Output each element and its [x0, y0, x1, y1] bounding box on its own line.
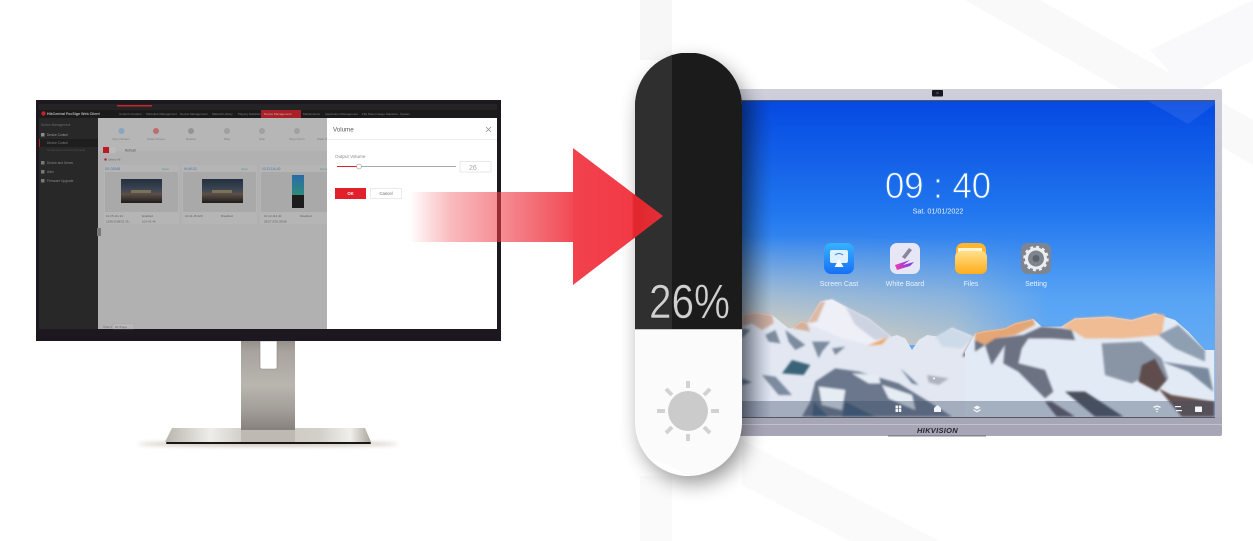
toolbar buttons: Reboot — [186, 137, 196, 141]
sidebar menu — [39, 118, 98, 329]
sidebar menu: Conference Control Terminal — [47, 148, 85, 152]
dimmed content area: 20 /Page — [115, 325, 127, 329]
device card 1: Enabled — [142, 214, 153, 218]
device card 1: 1296/1208/31.35... — [106, 220, 131, 224]
app: setting: Setting — [1025, 281, 1047, 288]
toolbar buttons: Open Screen — [112, 137, 130, 141]
toolbar buttons: Play — [224, 137, 230, 141]
volume dialog: Volume — [333, 126, 354, 134]
light pill section — [635, 329, 742, 476]
device card 3: 10.12.114.40 — [264, 214, 282, 218]
toolbar buttons: Stop Cut-In — [289, 137, 305, 141]
software screen — [39, 104, 497, 329]
device card 3: Open — [320, 167, 328, 171]
device card 2: IH-65.D2 — [184, 167, 197, 171]
device card 3: 25/27.5/32.25GB — [264, 220, 287, 224]
dimmed content area: Total 3 — [103, 325, 112, 329]
dimmed content area: Refresh — [125, 148, 136, 152]
sidebar menu: Device Management — [41, 123, 70, 127]
device card 3 — [260, 165, 328, 224]
app: files — [955, 243, 987, 288]
app: setting — [1021, 243, 1051, 288]
top navigation bar: System — [400, 112, 411, 116]
device card 1 — [104, 165, 179, 224]
panel frame: HIKVISION — [917, 426, 958, 435]
toolbar buttons: Clear P — [317, 137, 327, 141]
top navigation bar: Schedule Management — [146, 112, 177, 116]
sidebar menu: Device Control — [47, 141, 68, 145]
top navigation bar — [39, 110, 497, 118]
sidebar menu: Alert — [47, 170, 54, 174]
app: screen cast: Screen Cast — [820, 281, 858, 288]
app: white board: White Board — [886, 281, 924, 288]
percentage value: 26% — [649, 276, 730, 329]
sidebar menu: Device Control — [47, 133, 68, 137]
desktop monitor — [36, 100, 501, 446]
volume dialog: 26 — [469, 165, 477, 172]
icon: brightness sun — [657, 381, 719, 441]
device card 2 — [182, 165, 257, 224]
interactive flat panel — [735, 89, 1222, 436]
pill shadow — [640, 62, 747, 483]
device card 1: 101-41-46 — [142, 220, 156, 224]
device card 2: 10.41.15.220 — [185, 214, 203, 218]
device card 1: 10.25.111.12 — [106, 214, 123, 218]
device card 2: Disabled — [221, 214, 233, 218]
mountains right — [965, 313, 1214, 420]
clock: 09 : 40 — [885, 165, 991, 206]
top navigation bar: Playing Statistics — [238, 112, 261, 116]
top navigation bar: Device Management — [264, 112, 292, 116]
dark pill section — [635, 53, 742, 329]
app: files: Files — [964, 281, 979, 288]
volume dialog — [327, 118, 497, 329]
sidebar menu: Device and Server — [47, 161, 74, 165]
red arrow — [410, 148, 663, 285]
sidebar menu: Firmware Upgrade — [47, 179, 74, 183]
toolbar buttons: Stop — [259, 137, 265, 141]
date: Sat. 01/01/2022 — [913, 206, 963, 216]
app: white board — [886, 243, 924, 288]
monitor stand — [138, 341, 398, 446]
top navigation bar: HikCentral FocSign Web Client — [47, 112, 100, 116]
panel frame — [735, 89, 1222, 436]
monitor bezel — [36, 100, 501, 341]
top navigation bar: Flat Panel Usage Statistics — [362, 112, 398, 116]
top navigation bar: Device Management — [180, 112, 208, 116]
device card 3: Disabled — [300, 214, 312, 218]
toolbar buttons — [112, 128, 327, 141]
dimmed content area: Select All — [108, 158, 121, 162]
volume dialog: Output Volume — [335, 154, 366, 159]
volume dialog: OK — [347, 191, 354, 196]
device card 1: DS-D5A55 — [105, 167, 120, 171]
top navigation bar: Application Management — [325, 112, 358, 116]
app: screen cast — [820, 243, 858, 288]
device card 3: 10.12.114.40 — [262, 167, 281, 171]
dock icons — [896, 405, 1202, 412]
panel screen — [742, 101, 1215, 420]
top navigation bar: Content Creation — [119, 112, 142, 116]
brightness slider pill — [635, 53, 747, 483]
dimmed content area — [97, 118, 328, 329]
device card 1: Open — [162, 167, 170, 171]
toolbar buttons: Close Screen — [147, 137, 165, 141]
top navigation bar: Material Library — [212, 112, 233, 116]
top navigation bar: Maintenance — [303, 112, 321, 116]
mountains left — [742, 299, 982, 420]
volume dialog: Cancel — [379, 191, 393, 196]
infographic canvas — [36, 44, 1222, 496]
device card 2: Open — [241, 167, 249, 171]
